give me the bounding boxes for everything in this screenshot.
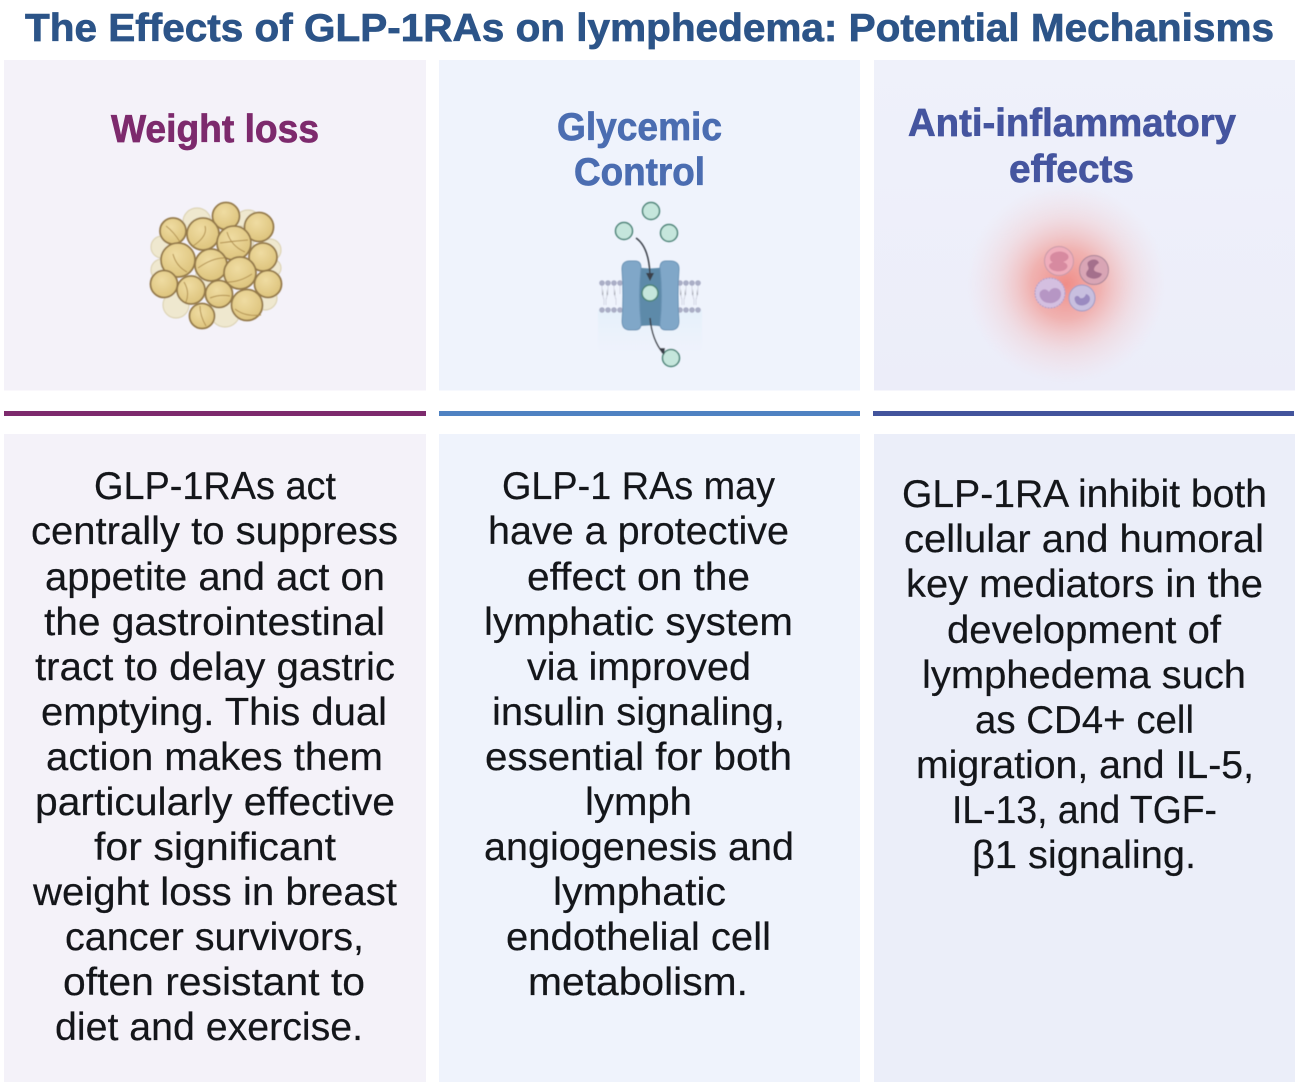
- icon: fat cell cluster: [150, 202, 282, 328]
- panel: anti-inflammatory header: [874, 60, 1295, 390]
- body text: weight loss: tract to delay gastric: [35, 646, 395, 689]
- panel: weight loss text: [4, 434, 426, 1082]
- body text: glycemic control: angiogenesis and: [484, 826, 794, 869]
- body text: weight loss: centrally to suppress: [31, 510, 398, 553]
- body text: anti-inflammatory: IL-13, and TGF-: [952, 789, 1217, 832]
- body text: glycemic control: GLP-1 RAs may: [502, 465, 776, 508]
- body text: glycemic control: [484, 465, 794, 1004]
- body text: anti-inflammatory: cellular and humoral: [904, 518, 1264, 561]
- body text: glycemic control: have a protective: [488, 510, 789, 553]
- heading: anti-inflammatory effects: effects: [1009, 148, 1134, 191]
- heading: glycemic control: [557, 106, 722, 194]
- divider: glycemic control: [439, 411, 860, 416]
- body text: weight loss: GLP-1RAs act: [94, 465, 336, 508]
- panel: glycemic control text: [439, 434, 860, 1082]
- body text: weight loss: for significant: [94, 826, 336, 869]
- heading: anti-inflammatory effects: [908, 102, 1236, 191]
- body text: weight loss: emptying. This dual: [41, 691, 387, 734]
- body text: weight loss: action makes them: [46, 736, 383, 779]
- body text: weight loss: weight loss in breast: [32, 871, 397, 914]
- panel: weight loss header: [4, 60, 426, 390]
- panel: anti-inflammatory text: [874, 434, 1295, 1082]
- body text: weight loss: cancer survivors,: [65, 916, 364, 959]
- icon: inflammatory cells: [966, 184, 1166, 384]
- body text: weight loss: diet and exercise.: [55, 1006, 363, 1049]
- body text: glycemic control: endothelial cell: [506, 916, 771, 959]
- heading: weight loss: Weight loss: [111, 108, 319, 151]
- body text: anti-inflammatory: GLP-1RA inhibit both: [902, 473, 1267, 516]
- heading: glycemic control: Control: [574, 151, 705, 194]
- body text: anti-inflammatory: β1 signaling.: [972, 834, 1196, 877]
- body text: weight loss: often resistant to: [63, 961, 365, 1004]
- body text: anti-inflammatory: development of: [947, 609, 1221, 652]
- body text: anti-inflammatory: migration, and IL-5,: [916, 744, 1254, 787]
- body text: weight loss: particularly effective: [35, 781, 395, 824]
- body text: glycemic control: insulin signaling,: [492, 691, 785, 734]
- body text: anti-inflammatory: lymphedema such: [922, 654, 1246, 697]
- body text: glycemic control: lymphatic: [553, 871, 726, 914]
- body text: anti-inflammatory: key mediators in the: [906, 563, 1263, 606]
- panel: glycemic control header: [439, 60, 860, 390]
- body text: anti-inflammatory: as CD4+ cell: [975, 699, 1194, 742]
- body text: glycemic control: lymphatic system: [484, 601, 793, 644]
- icon: glucose channel: [598, 202, 702, 366]
- body text: weight loss: the gastrointestinal: [44, 601, 385, 644]
- body text: glycemic control: metabolism.: [528, 961, 748, 1004]
- body text: weight loss: appetite and act on: [45, 556, 385, 599]
- heading: glycemic control: Glycemic: [557, 106, 722, 149]
- body text: glycemic control: essential for both: [485, 736, 792, 779]
- body text: glycemic control: lymph: [585, 781, 692, 824]
- body text: glycemic control: via improved: [527, 646, 751, 689]
- title: The Effects of GLP-1RAs on lymphedema: Potential Mechanisms: [25, 7, 1274, 50]
- body text: anti-inflammatory: [902, 473, 1267, 877]
- divider: anti-inflammatory: [873, 411, 1294, 416]
- divider: weight loss: [4, 411, 426, 416]
- heading: anti-inflammatory effects: Anti-inflammatory: [908, 102, 1236, 145]
- body text: glycemic control: effect on the: [527, 556, 750, 599]
- body text: weight loss: [31, 465, 398, 1049]
